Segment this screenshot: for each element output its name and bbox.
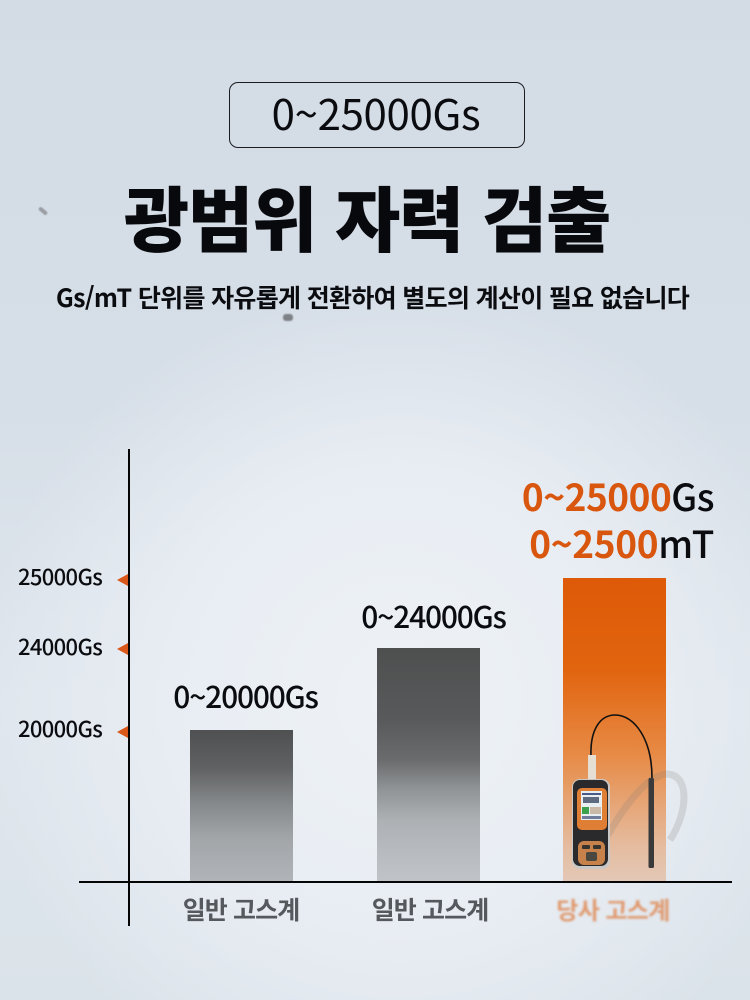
- marker: 25000Gs: [117, 574, 128, 586]
- marker: 20000Gs: [117, 726, 128, 738]
- bar chart: [18, 449, 732, 927]
- range badge: [229, 82, 525, 148]
- probe connector: [588, 755, 596, 780]
- probe shadow: [608, 774, 684, 840]
- probe cable: [591, 715, 652, 778]
- bar 2 value: 0~24000Gs: [361, 593, 506, 637]
- bar 3: [563, 578, 666, 881]
- bar 1 label: 일반 고스계: [183, 891, 299, 927]
- bar 1 value: 0~20000Gs: [173, 673, 318, 717]
- speck: [283, 314, 293, 321]
- badge text: 0~25000Gs: [272, 82, 480, 143]
- marker: 24000Gs: [117, 643, 128, 655]
- bar 2: [377, 648, 480, 881]
- y label: 25000Gs: 25000Gs: [18, 560, 102, 592]
- bar 3 value: 0~25000Gs: [522, 468, 714, 522]
- bar 3 label: 당사 고스계: [556, 891, 670, 926]
- icon: gauss meter: [572, 714, 688, 869]
- bar 3 value mT: 0~2500mT: [529, 515, 714, 569]
- speck: [38, 206, 48, 216]
- y label: 20000Gs: 20000Gs: [18, 712, 102, 744]
- y label: 24000Gs: 24000Gs: [18, 630, 102, 662]
- x axis: [79, 881, 732, 883]
- title: 광범위 자력 검출: [124, 165, 610, 267]
- bar 1: [190, 730, 293, 881]
- bar 2 label: 일반 고스계: [372, 891, 488, 927]
- meter body: [572, 779, 610, 869]
- subtitle: Gs/mT 단위를 자유롭게 전환하여 별도의 계산이 필요 없습니다: [56, 279, 689, 315]
- probe rod: [648, 778, 654, 868]
- y axis: [128, 449, 130, 926]
